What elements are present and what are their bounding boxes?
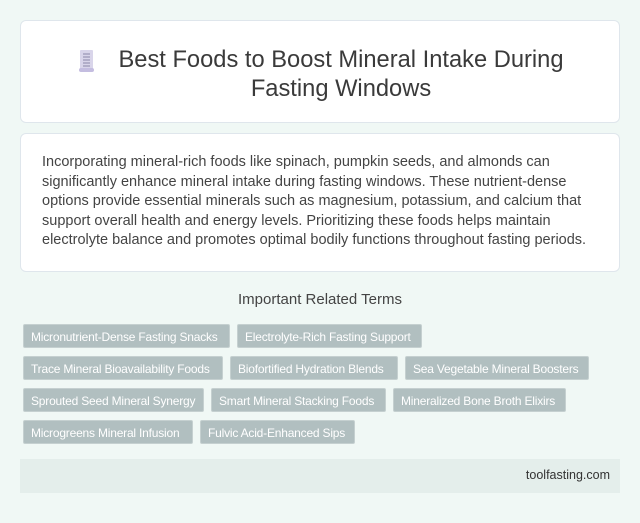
tags: Biofortified Hydration Blends bbox=[238, 362, 384, 376]
title: Best Foods to Boost Mineral Intake During bbox=[118, 47, 564, 73]
header card bbox=[20, 20, 620, 123]
footer bbox=[20, 459, 620, 493]
description text: electrolyte balance and promotes optimal bodily functions throughout fasting periods. bbox=[42, 232, 586, 248]
tags: Smart Mineral Stacking Foods bbox=[219, 394, 374, 408]
title: Fasting Windows bbox=[251, 76, 431, 102]
tags: Mineralized Bone Broth Elixirs bbox=[401, 394, 555, 408]
description text: Incorporating mineral-rich foods like spinach, pumpkin seeds, and almonds can bbox=[42, 154, 550, 170]
title bbox=[118, 47, 564, 102]
tags: Fulvic Acid-Enhanced Sips bbox=[208, 426, 345, 440]
tags: Micronutrient-Dense Fasting Snacks bbox=[31, 330, 218, 344]
tags: Microgreens Mineral Infusion bbox=[31, 426, 179, 440]
description text bbox=[42, 154, 586, 248]
icon: document bbox=[79, 50, 94, 72]
tags: Sprouted Seed Mineral Synergy bbox=[31, 394, 195, 408]
description text: support overall health and energy levels. Prioritizing these foods helps maintain bbox=[42, 212, 551, 228]
description text: options provide essential minerals such as magnesium, potassium, and calcium that bbox=[42, 193, 581, 209]
tags: Sea Vegetable Mineral Boosters bbox=[413, 362, 578, 376]
description card bbox=[20, 133, 620, 272]
tags: Trace Mineral Bioavailability Foods bbox=[31, 362, 210, 376]
description text: significantly enhance mineral intake during fasting windows. These nutrient-dense bbox=[42, 174, 566, 190]
footer credit: toolfasting.com bbox=[526, 468, 610, 482]
tags: Electrolyte-Rich Fasting Support bbox=[245, 330, 411, 344]
related terms heading: Important Related Terms bbox=[238, 291, 402, 308]
